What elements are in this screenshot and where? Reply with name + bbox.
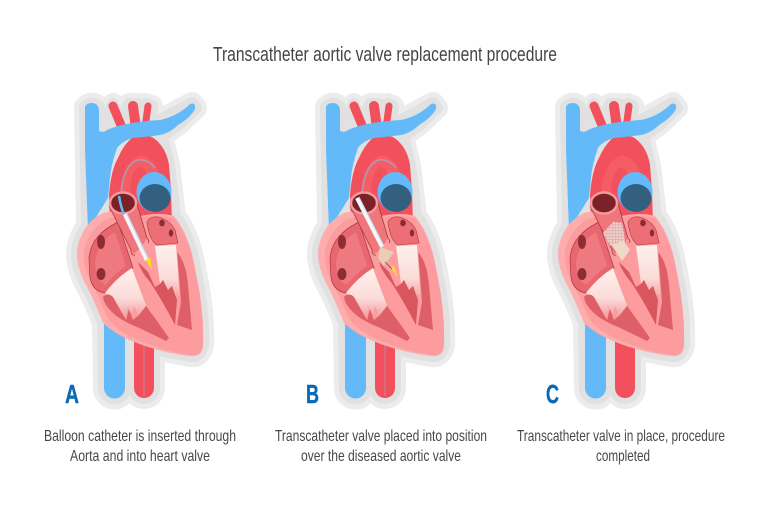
atrium openings: [97, 235, 105, 249]
atrium openings: [578, 235, 586, 249]
panel A: balloon catheter heart: [77, 103, 203, 398]
aorta arch: [350, 135, 413, 225]
label B: B: [306, 379, 319, 409]
caption A: Balloon catheter is inserted through: [44, 428, 236, 445]
arch arteries: [354, 106, 389, 130]
label A: A: [65, 379, 79, 409]
catheter body: [119, 196, 124, 214]
caption A: [44, 428, 236, 465]
caption C: completed: [596, 448, 650, 465]
left atrium chamber: [628, 217, 659, 245]
pulmonary artery ring: [378, 172, 412, 212]
vena cava with branch: [85, 103, 195, 230]
descending aorta: [615, 340, 635, 398]
descending aorta: [134, 340, 154, 398]
lower vena cava: [345, 320, 366, 398]
tricuspid chordae: [346, 268, 387, 318]
left ventricle muscle: [177, 250, 192, 330]
mitral chordae: [155, 245, 180, 300]
left ventricle muscle: [418, 250, 433, 330]
heart silhouette halo: [77, 103, 203, 398]
lower vena cava: [585, 320, 606, 398]
panel C: valve in place heart: [558, 103, 684, 398]
aortic root tube: [590, 192, 628, 254]
heart body: [318, 211, 444, 356]
caption B: over the diseased aortic valve: [301, 448, 461, 465]
mitral chordae: [636, 245, 661, 300]
vena cava with branch: [326, 103, 436, 230]
right atrium chamber: [89, 222, 133, 293]
catheter yellow tip: [391, 266, 398, 279]
aorta arch: [590, 135, 653, 225]
right atrium chamber: [570, 222, 614, 293]
catheter body: [357, 198, 382, 247]
descending aorta: [375, 340, 395, 398]
mitral chordae: [396, 245, 421, 300]
transcatheter valve: [378, 247, 394, 266]
left atrium openings: [640, 220, 646, 226]
aorta arch: [109, 135, 172, 225]
right atrium chamber: [330, 222, 374, 293]
panel B: valve placement heart: [318, 103, 444, 398]
heart silhouette halo: [318, 103, 444, 398]
heart body: [558, 211, 684, 356]
pulmonary artery ring: [618, 172, 652, 212]
title: Transcatheter aortic valve replacement procedure: [213, 44, 557, 66]
tricuspid chordae: [105, 268, 146, 318]
catheter wire in aorta: [362, 160, 396, 195]
right ventricle muscle: [103, 294, 169, 341]
left atrium chamber: [147, 217, 178, 245]
catheter wire in aorta: [121, 160, 155, 195]
label C: C: [546, 379, 559, 409]
stent mesh: [603, 222, 625, 246]
caption A: Aorta and into heart valve: [70, 448, 210, 465]
caption C: [517, 428, 725, 465]
caption B: Transcatheter valve placed into position: [275, 428, 487, 445]
caption B: [275, 428, 487, 465]
heart silhouette halo: [558, 103, 684, 398]
right ventricle muscle: [344, 294, 410, 341]
vena cava with branch: [566, 103, 676, 230]
atrium openings: [338, 235, 346, 249]
left ventricle muscle: [658, 250, 673, 330]
right ventricle muscle: [584, 294, 650, 341]
left atrium openings: [400, 220, 406, 226]
tricuspid chordae: [586, 268, 627, 318]
arch arteries: [594, 106, 629, 130]
lower vena cava: [104, 320, 125, 398]
aortic root tube: [109, 192, 147, 254]
aortic root tube: [350, 192, 388, 254]
heart body: [77, 211, 203, 356]
catheter yellow tip: [146, 257, 152, 270]
arch arteries: [113, 106, 148, 130]
stented valve: [603, 222, 630, 261]
guide wire: [385, 262, 392, 269]
left atrium openings: [159, 220, 165, 226]
left atrium chamber: [388, 217, 419, 245]
pulmonary artery ring: [136, 172, 172, 212]
